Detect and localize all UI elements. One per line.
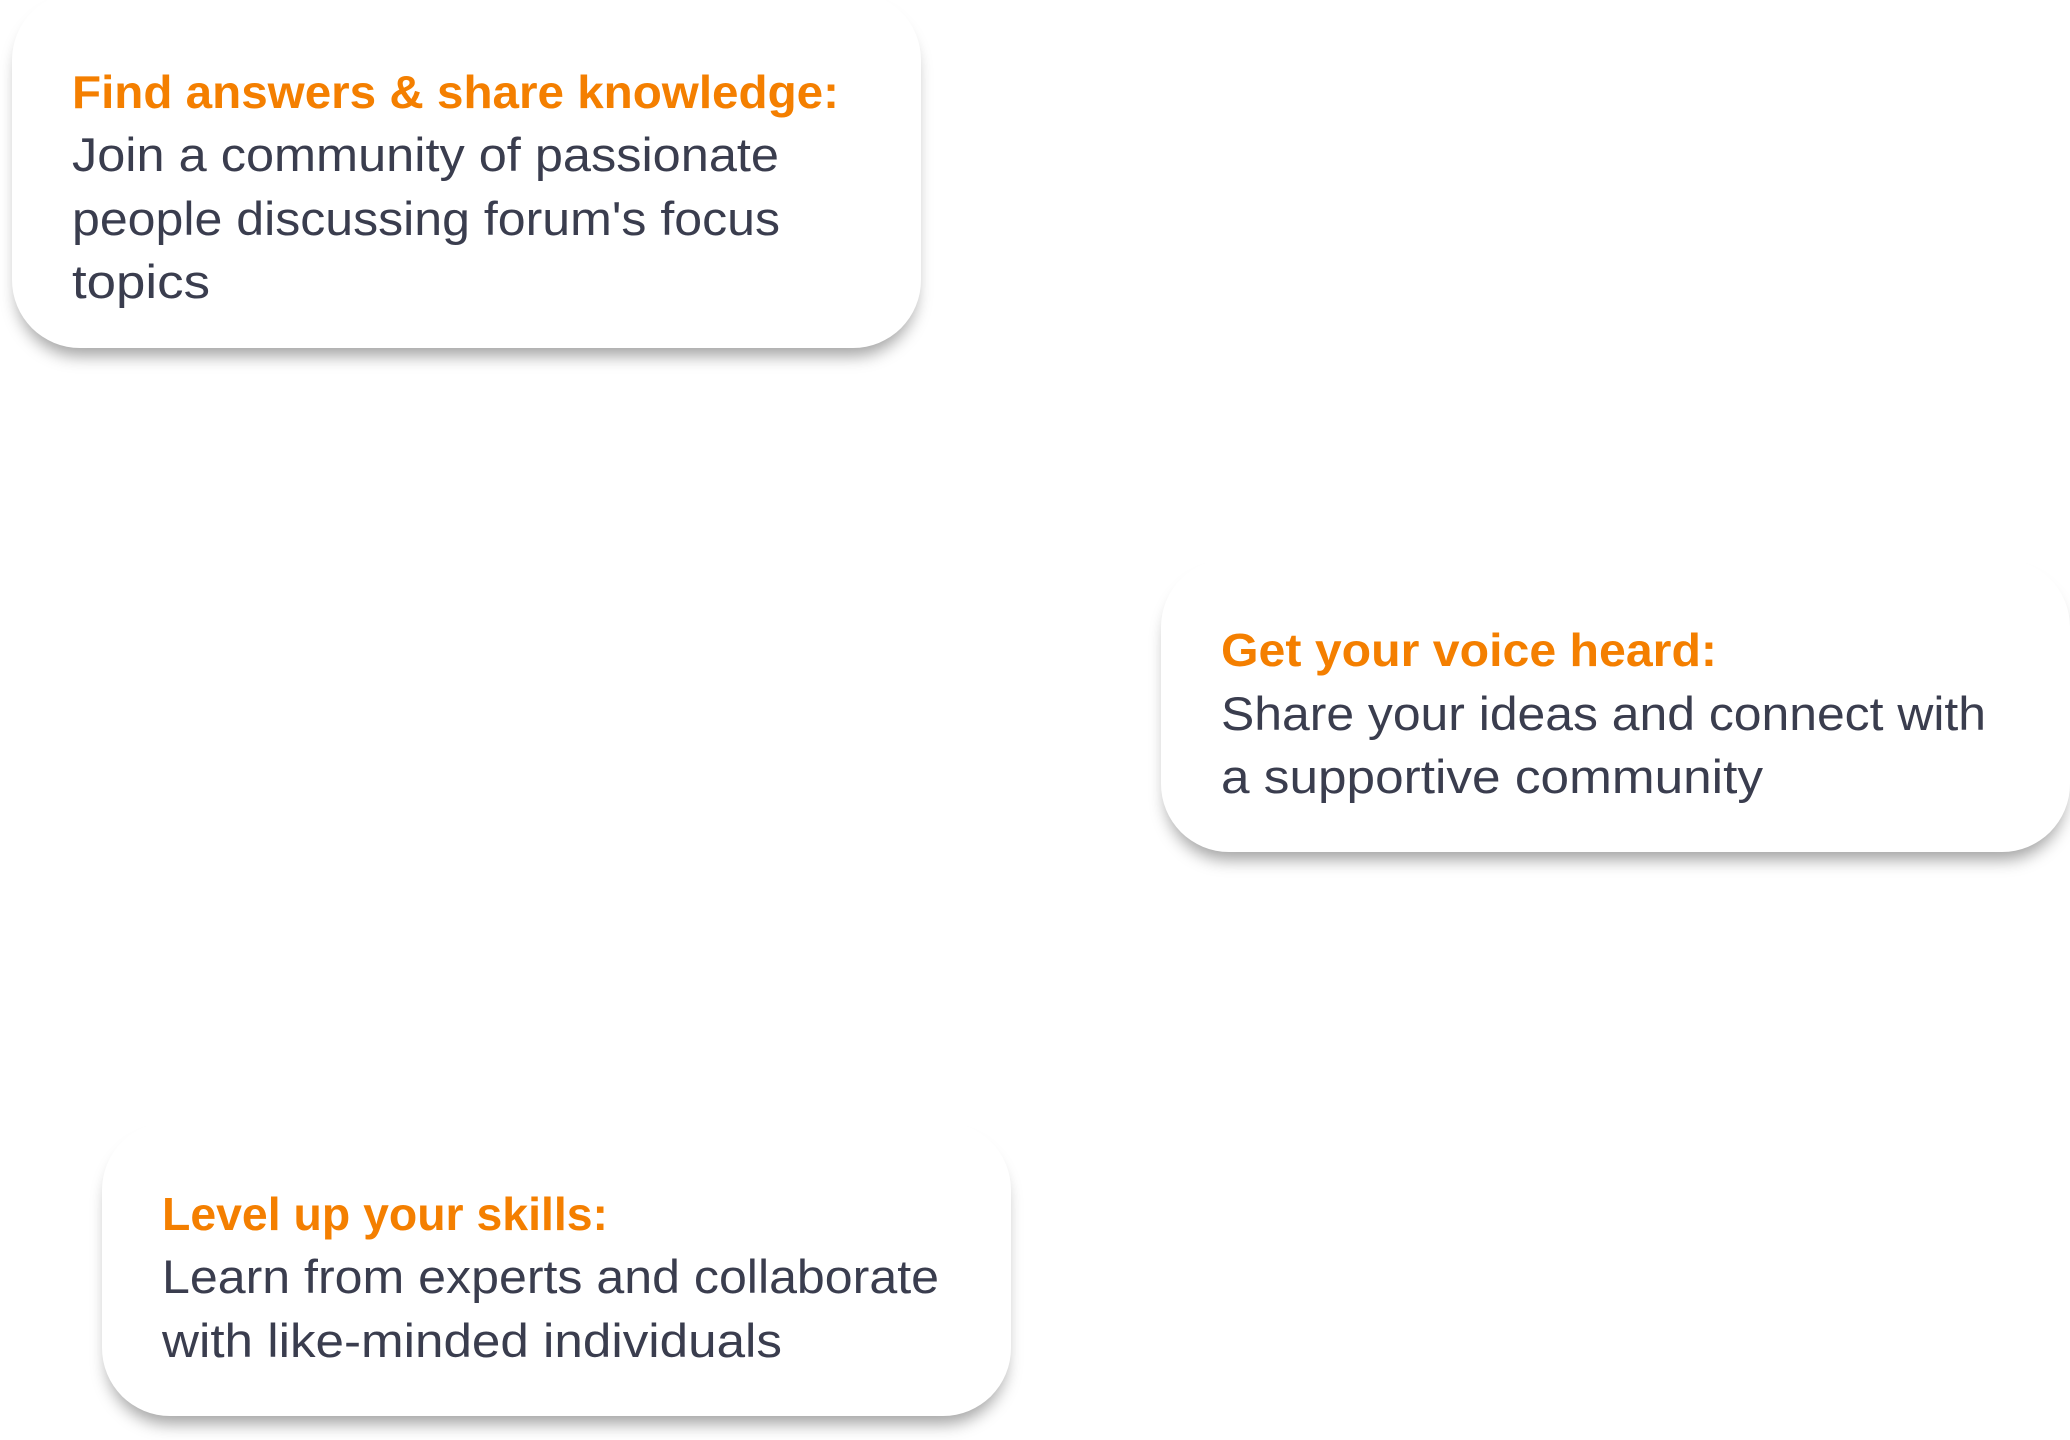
text block: voice heard bbox=[1221, 624, 1986, 803]
text block: level up bbox=[161, 1188, 939, 1367]
panel: level up your skills bbox=[102, 1122, 1011, 1416]
heading: level up your skills: Level up your skills: bbox=[162, 1188, 608, 1240]
heading: get your voice heard: Get your voice heard: bbox=[1221, 624, 1717, 676]
panel: get your voice heard bbox=[1161, 559, 2070, 852]
body line 1: Join a community of passionate bbox=[72, 128, 779, 181]
body line 3: topics bbox=[72, 255, 210, 308]
body line 1: Learn from experts and collaborate bbox=[162, 1250, 939, 1303]
body line 2: with like-minded individuals bbox=[161, 1314, 782, 1367]
text block: find answers bbox=[72, 66, 839, 308]
body line 1: Share your ideas and connect with bbox=[1221, 687, 1986, 740]
body line 2: a supportive community bbox=[1221, 750, 1764, 803]
panel: find answers and share knowledge bbox=[12, 0, 921, 348]
heading: find answers: Find answers & share knowledge: bbox=[72, 66, 839, 118]
body line 2: people discussing forum's focus bbox=[72, 192, 780, 245]
